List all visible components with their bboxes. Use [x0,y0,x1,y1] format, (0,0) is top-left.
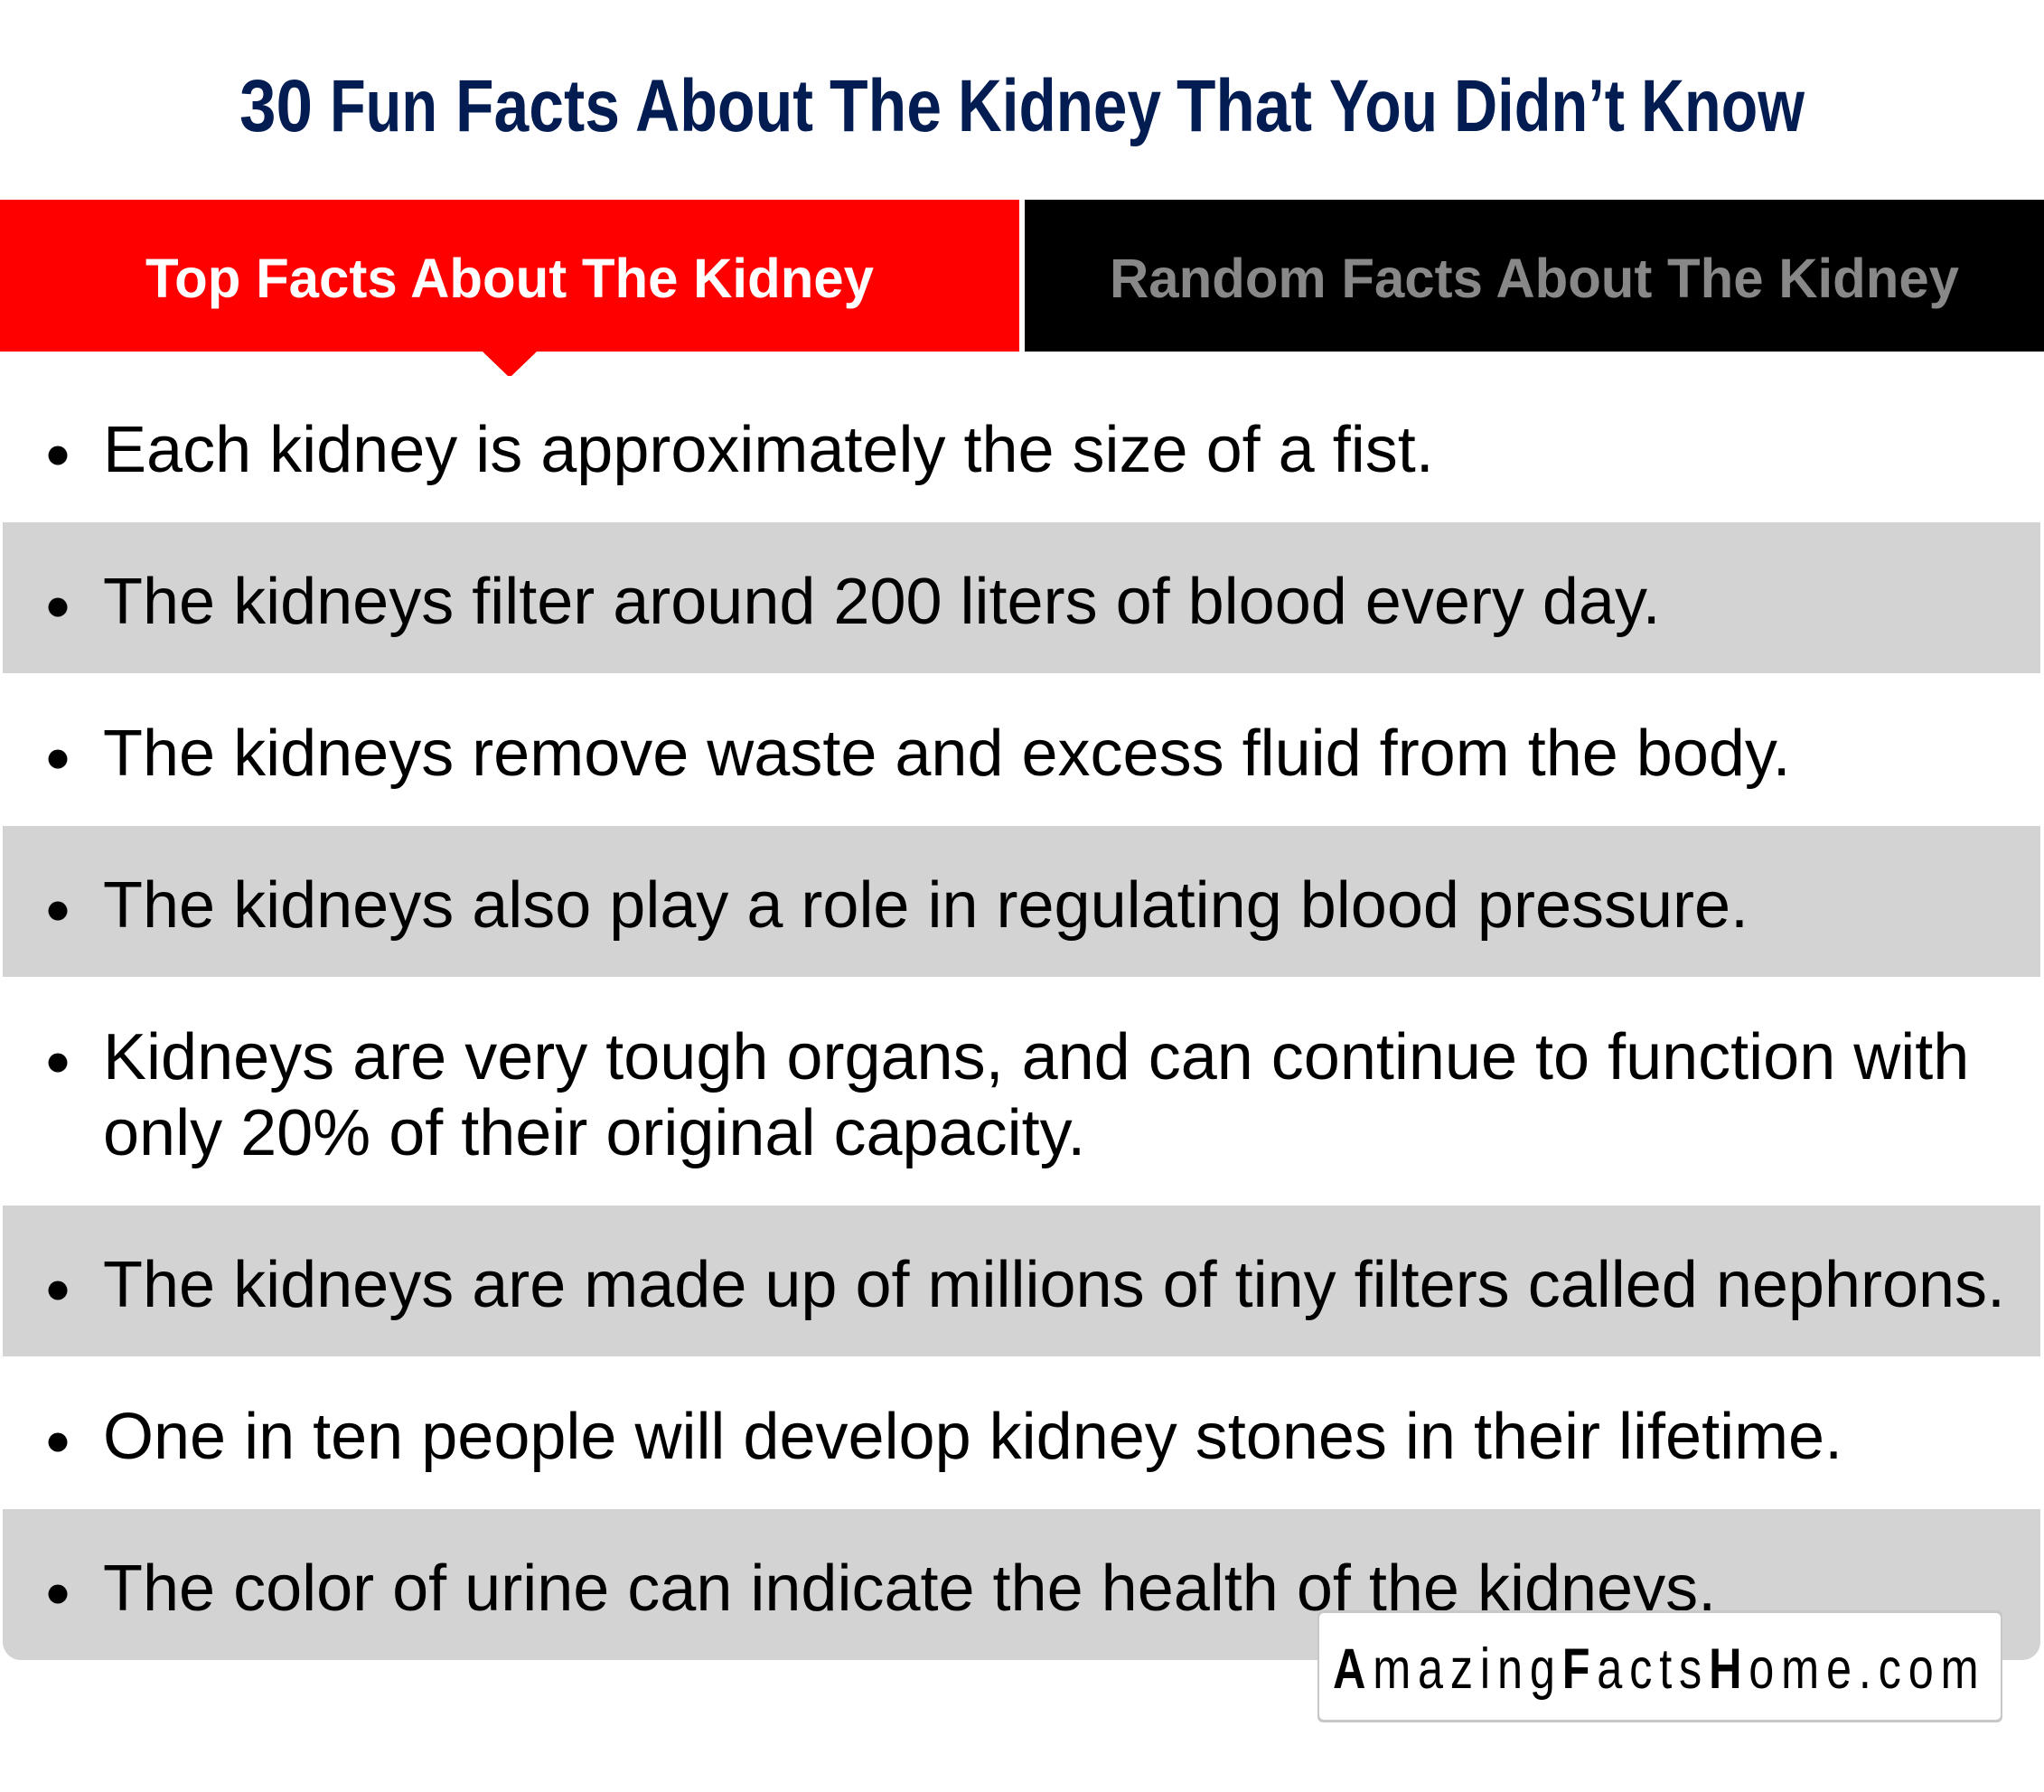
fact 1: Each kidney is approximately the size of a fist. [103,414,1434,486]
title: 30 [239,65,313,147]
title: Facts [455,65,620,147]
fact 5 [49,1021,1969,1169]
title: The [830,65,942,147]
tab: top facts (active) [0,200,1019,376]
fact 4 row: The kidneys also play a role in regulating blood pressure. [103,869,1749,942]
title [239,65,1805,147]
title: That [1177,65,1312,147]
title: Didn’t [1454,65,1625,147]
fact 8 row [3,1509,2040,1660]
badge: site name: AmazingFactsHome.com [1333,1637,1985,1701]
title: About [635,65,813,147]
fact 5: only 20% of their original capacity. [103,1097,1085,1169]
fact 4 row [3,826,2040,977]
tab: random facts (inactive) [1025,200,2044,352]
title: Fun [330,65,437,147]
title: Know [1641,65,1805,147]
title: You [1329,65,1438,147]
fact 2 row: The kidneys filter around 200 liters of blood every day. [103,566,1661,638]
fact 8 row: The color of urine can indicate the health of the kidneys. [103,1553,1716,1625]
fact 2 row [3,522,2040,673]
fact 3: The kidneys remove waste and excess fluid from the body. [103,718,1791,790]
tab: top facts (active): Top Facts About The Kidney [145,248,874,309]
title: Kidney [958,65,1161,147]
fact 5: Kidneys are very tough organs, and can continue to function with [103,1021,1969,1093]
fact 6 row [3,1206,2040,1356]
fact 6 row: The kidneys are made up of millions of tiny filters called nephrons. [103,1249,2005,1321]
tab: random facts (inactive): Random Facts About The Kidney [1110,248,1959,309]
badge: site name [1317,1610,2002,1722]
fact 7: One in ten people will develop kidney stones in their lifetime. [103,1401,1842,1473]
